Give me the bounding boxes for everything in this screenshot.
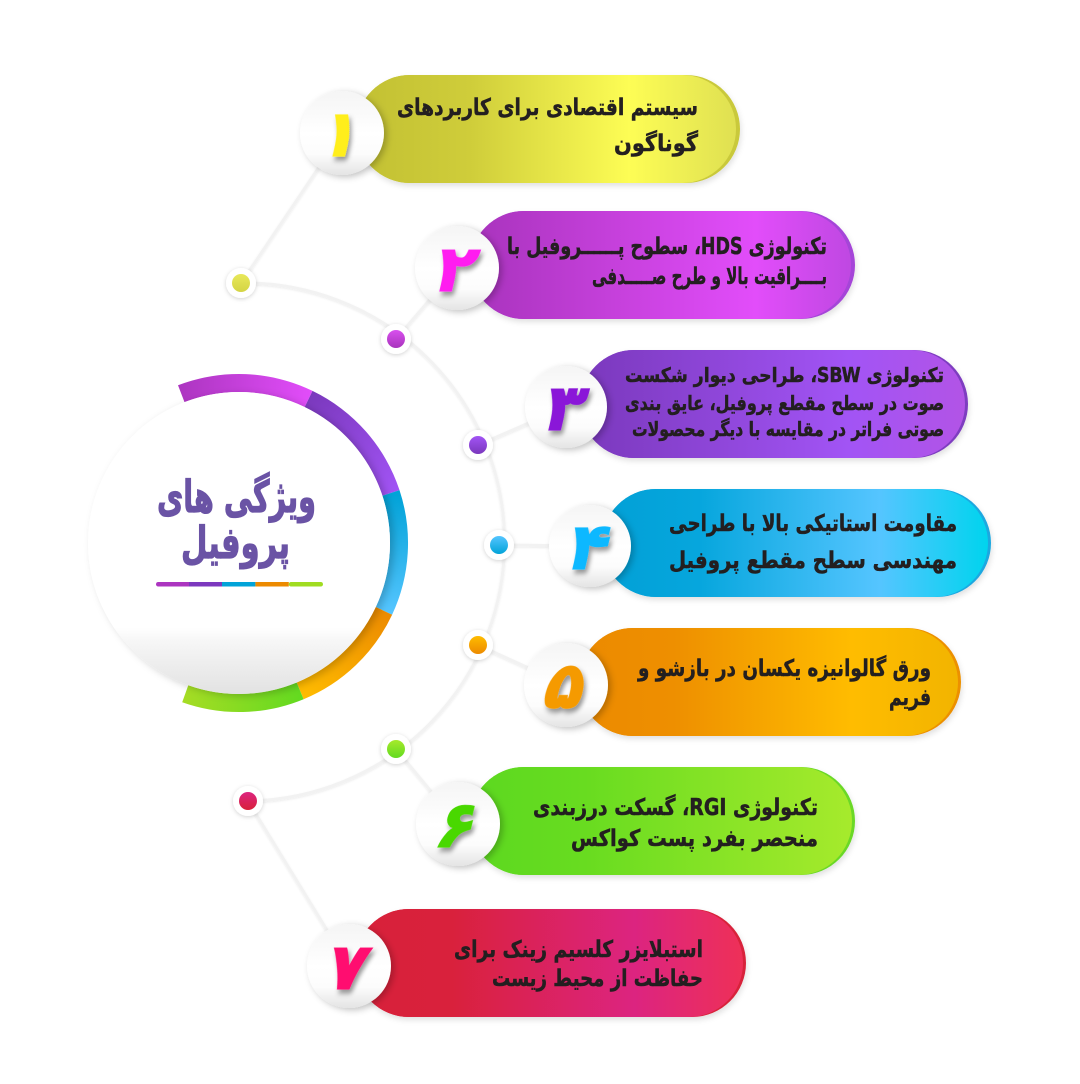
badge: 2: ۲ [428, 233, 485, 307]
node: 2 [381, 324, 411, 354]
text: item 1 [397, 95, 699, 157]
text: item 4: مقاومت استاتیکی بالا با طراحی [669, 511, 957, 537]
badge: 1 [300, 91, 384, 175]
node: 4 [484, 530, 514, 560]
text: item 5: فریم [889, 685, 931, 711]
badge: 3 [525, 366, 607, 448]
text: item 1: سیستم اقتصادی برای کاربردهای [397, 95, 698, 121]
node: 1 [226, 268, 256, 298]
badge: 4 [549, 505, 631, 587]
panel: item 3 [580, 350, 968, 458]
text: item 7 [454, 937, 703, 992]
node: 3 [463, 430, 493, 460]
text: item 5 [637, 655, 931, 711]
text: item 1: گوناگون [614, 130, 699, 157]
badge: 7: ۷ [320, 931, 377, 1005]
text: item 2: بــــراقیت بالا و طرح صـــــدفی [592, 264, 827, 290]
panel: item 2 [470, 211, 855, 319]
badge: 6 [416, 782, 500, 866]
text: item 6: تکنولوژی RGI، گسکت درزبندی [533, 794, 818, 821]
central title [157, 471, 316, 569]
badge: 4: ۴ [561, 511, 618, 585]
panel: item 5 [579, 628, 961, 736]
connector arc and lines [241, 133, 590, 966]
panel: item 7 [355, 909, 746, 1017]
text: item 3 [625, 363, 944, 441]
text: item 2: تکنولوژی HDS، سطوح پــــــروفیل با [507, 234, 827, 260]
badge: 6: ۶ [429, 789, 486, 863]
text: item 7: حفاظت از محیط زیست [492, 966, 703, 992]
text: item 4 [669, 511, 957, 574]
node: 5 [463, 630, 493, 660]
ring segment: magenta [178, 374, 312, 407]
text: item 3: تکنولوژی SBW، طراحی دیوار شکست [625, 363, 944, 387]
central ring [178, 374, 408, 712]
text: item 3: صوتی فراتر در مقایسه با دیگر محصولات [632, 417, 944, 441]
node: 6 [381, 734, 411, 764]
central white disc [88, 392, 390, 694]
ring segment: green [182, 682, 304, 712]
ring segment: violet [305, 391, 400, 496]
panel: item 6 [470, 767, 855, 875]
central title: ویژگی های [157, 471, 316, 523]
title underline [156, 582, 323, 586]
panel: item 4 [602, 489, 991, 597]
text: item 2 [507, 234, 827, 290]
text: item 5: ورق گالوانیزه یکسان در بازشو و [637, 655, 931, 682]
text: item 3: صوت در سطح مقطع پروفیل، عایق بندی [625, 391, 944, 416]
central title: پروفیل [181, 518, 290, 569]
node: 7 [233, 786, 263, 816]
badge: 1: ۱ [313, 98, 370, 172]
badge: 7 [307, 924, 391, 1008]
text: item 6 [533, 794, 818, 852]
badge: 5 [524, 643, 608, 727]
badge: 5: ۵ [537, 650, 594, 724]
text: item 4: مهندسی سطح مقطع پروفیل [669, 548, 957, 574]
text: item 6: منحصر بفرد پست کواکس [571, 826, 818, 852]
text: item 7: استبلایزر کلسیم زینک برای [454, 937, 703, 963]
badge: 3: ۳ [537, 372, 594, 446]
panel: item 1 [356, 75, 740, 183]
badge: 2 [415, 226, 499, 310]
ring segment: blue [376, 490, 408, 615]
ring segment: orange [297, 607, 392, 699]
